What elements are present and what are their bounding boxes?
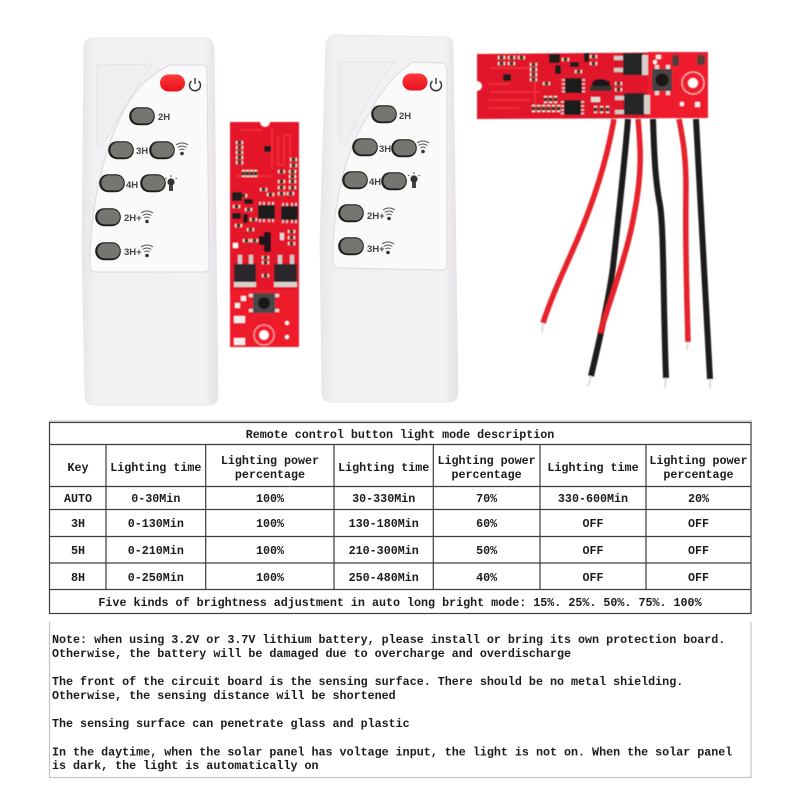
row: 3H <box>71 517 709 531</box>
button panel: right remote: 2H <box>399 111 411 122</box>
button panel: right remote <box>333 62 447 270</box>
table header row: Lighting time <box>110 461 201 475</box>
note: daytime behaviour: In the daytime, when the solar panel has voltage input, the light is not on. When the solar panel <box>52 746 732 760</box>
row: 8H: 8H <box>71 571 85 585</box>
table title: Remote control button light mode description <box>246 428 554 442</box>
row: 5H <box>71 544 709 558</box>
table header row <box>67 454 748 482</box>
table header row: percentage <box>663 468 734 482</box>
circuit board: vertical <box>230 122 299 347</box>
note: battery protection: Note: when using 3.2V or 3.7V lithium battery, please install or bring its own protection board. <box>52 633 725 647</box>
note: daytime behaviour: is dark, the light is automatically on <box>52 759 319 773</box>
remote control: right <box>320 35 458 402</box>
wires <box>542 119 710 388</box>
table: remote control button light mode description <box>49 421 752 614</box>
table header row: Lighting time <box>547 461 639 475</box>
row: 8H: OFF <box>688 571 709 585</box>
row: 5H: 100% <box>256 544 285 558</box>
button panel: left remote <box>90 65 209 272</box>
table header row: Lighting time <box>338 461 429 475</box>
note: sensing surface shielding: The front of the circuit board is the sensing surface. There should be no metal shielding. <box>52 675 683 689</box>
note: battery protection <box>52 633 725 661</box>
table header row: Lighting power <box>221 454 319 468</box>
row: 3H: 130-180Min <box>349 517 419 531</box>
table header row: Key <box>67 461 89 475</box>
row: 3H: OFF <box>582 517 604 531</box>
row: 5H: 0-210Min <box>128 544 184 558</box>
row: 5H: OFF <box>582 544 604 558</box>
button panel: left remote: 2H <box>158 112 170 123</box>
remote control: left <box>82 38 218 405</box>
note: penetration: The sensing surface can penetrate glass and plastic <box>52 717 410 731</box>
row: 8H: 100% <box>256 571 285 585</box>
row: 3H: 0-130Min <box>128 517 184 531</box>
table header row: Lighting power <box>649 454 748 468</box>
row: 8H: 250-480Min <box>349 571 419 585</box>
circuit board: horizontal <box>477 52 708 119</box>
button panel: left remote: 4H <box>126 180 138 191</box>
row: 5H: 5H <box>71 544 85 558</box>
table header row: percentage <box>452 468 522 482</box>
note: battery protection: Otherwise, the battery will be damaged due to overcharge and overdischarge <box>52 647 571 661</box>
button panel: right remote: 3H <box>379 144 391 155</box>
button panel: right remote: 3H+ <box>367 244 385 255</box>
notes panel <box>50 622 751 778</box>
note: sensing surface shielding: Otherwise, the sensing distance will be shortened <box>52 689 396 703</box>
row: 3H: 3H <box>71 517 85 531</box>
button panel: left remote: 2H+ <box>124 213 142 224</box>
row: 3H: 100% <box>256 517 285 531</box>
table footer: brightness adjustment: Five kinds of brightness adjustment in auto long bright mode: 15%. 25%. 50%. 75%. 100% <box>98 596 703 610</box>
row: AUTO: 30-330Min <box>352 492 415 506</box>
row: AUTO: 0-30Min <box>131 492 180 506</box>
row: 5H: 210-300Min <box>349 544 419 558</box>
note: sensing surface shielding <box>52 675 683 703</box>
row: 3H: 60% <box>476 517 498 531</box>
row: AUTO: 100% <box>256 492 285 506</box>
note: daytime behaviour <box>52 746 732 773</box>
row: 8H: OFF <box>582 571 604 585</box>
row: AUTO: 70% <box>476 492 498 506</box>
table header row: Lighting power <box>437 454 536 468</box>
row: AUTO: AUTO <box>64 492 92 506</box>
row: AUTO: 330-600Min <box>558 492 628 506</box>
button panel: right remote: 2H+ <box>367 211 385 222</box>
row: 8H <box>71 571 709 585</box>
row: AUTO: 20% <box>688 492 710 506</box>
row: 8H: 40% <box>476 571 498 585</box>
button panel: right remote: 4H <box>369 177 381 188</box>
button panel: left remote: 3H+ <box>124 247 142 258</box>
row: AUTO <box>64 492 710 506</box>
row: 3H: OFF <box>688 517 709 531</box>
table header row: percentage <box>235 468 305 482</box>
row: 5H: 50% <box>476 544 498 558</box>
row: 8H: 0-250Min <box>128 571 184 585</box>
row: 5H: OFF <box>688 544 709 558</box>
button panel: left remote: 3H <box>136 146 148 157</box>
